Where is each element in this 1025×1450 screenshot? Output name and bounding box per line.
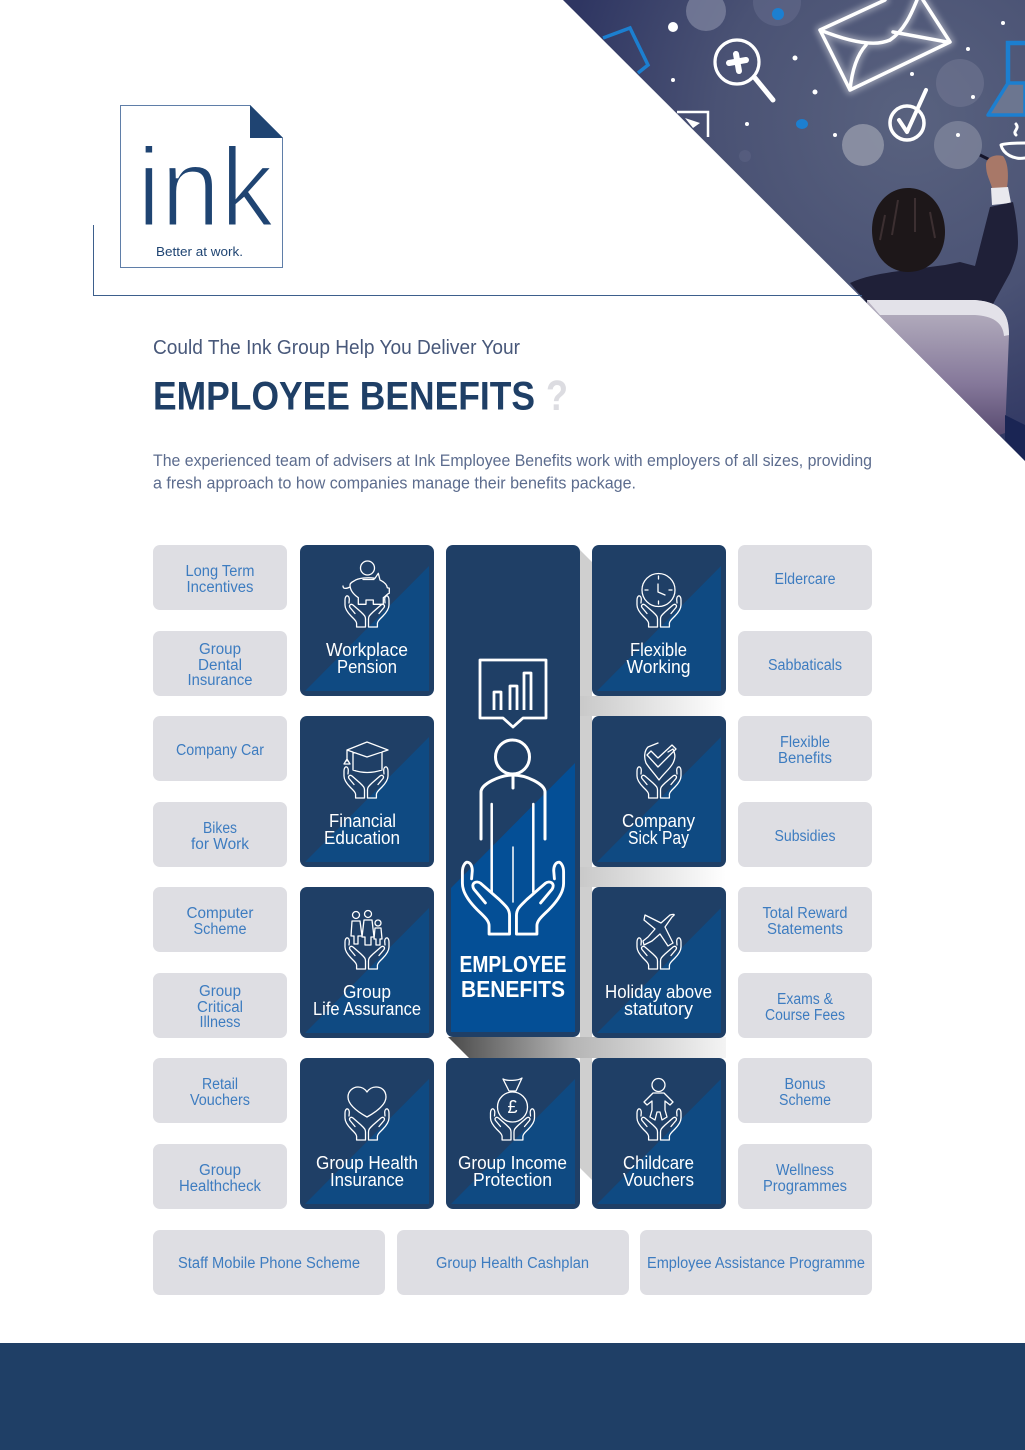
panel: bottom grey benefits: Staff Mobile Phone Scheme (178, 1255, 360, 1272)
tile: Flexible Working: Flexible (630, 640, 687, 660)
intro paragraph: a fresh approach to how companies manage their benefits package. (153, 474, 636, 492)
panel: right grey benefits: Programmes (763, 1178, 847, 1195)
footer band (0, 1343, 1025, 1450)
panel: right grey benefits: Sabbaticals (768, 657, 842, 674)
tile: Financial Education (300, 716, 434, 867)
panel: left grey benefits: for Work (191, 836, 249, 853)
title: EMPLOYEE BENEFITS (153, 374, 535, 418)
icon: heart in hands (345, 1087, 389, 1140)
tile: Company Sick Pay: Sick Pay (628, 828, 689, 848)
icon: chart speech bubble (480, 660, 546, 727)
panel: left grey benefits: Dental (198, 657, 242, 674)
logo: ink (137, 125, 275, 250)
panel: right grey benefits: Wellness (776, 1162, 834, 1179)
logo: Better at work. (156, 244, 243, 259)
tile: Group Life Assurance: Group (343, 982, 391, 1002)
tile: Workplace Pension: Workplace (326, 640, 408, 660)
panel: bottom grey benefits: Employee Assistance Programme (647, 1255, 865, 1272)
title: ? (546, 372, 568, 420)
icon: shield check in hands (637, 743, 681, 798)
panel: right grey benefits: Eldercare (774, 571, 836, 588)
panel: left grey benefits: Critical (197, 999, 243, 1016)
intro paragraph: The experienced team of advisers at Ink Employee Benefits work with employers of all sizes, providing (153, 451, 872, 470)
panel: left grey benefits: Group (199, 641, 241, 658)
panel: left grey benefits: Long Term (186, 563, 254, 580)
panel: left grey benefits (153, 545, 287, 1209)
icon: child in hands (637, 1078, 681, 1140)
central tile: Employee Benefits: BENEFITS (461, 976, 565, 1002)
panel: bottom grey benefits: Group Health Cashplan (436, 1255, 589, 1272)
tile: Holiday above statutory (592, 887, 726, 1038)
central tile: Employee Benefits: EMPLOYEE (460, 951, 566, 977)
panel: left grey benefits: Illness (200, 1014, 241, 1031)
tile: Group Health Insurance: Group Health (316, 1153, 418, 1173)
tile: Group Life Assurance (300, 887, 434, 1038)
panel: bottom grey benefits (153, 1230, 872, 1295)
panel: right grey benefits: Bonus (784, 1076, 826, 1093)
tile: Group Income Protection (446, 1058, 580, 1209)
tile: Childcare Vouchers: Childcare (623, 1153, 694, 1173)
header rule (94, 225, 862, 296)
panel: right grey benefits: Flexible (780, 734, 830, 751)
central tile: Employee Benefits (446, 545, 580, 1037)
panel: left grey benefits: Group (199, 983, 241, 1000)
icon: family in hands (345, 910, 389, 969)
icon: money bag in hands (490, 1078, 534, 1140)
tile: Holiday above statutory: statutory (624, 999, 693, 1019)
tile: Company Sick Pay: Company (622, 811, 695, 831)
background photo: man drawing icons on wall (563, 0, 1025, 461)
tile: Group Health Insurance (300, 1058, 434, 1209)
icon: pound sign: £ (507, 1097, 518, 1117)
panel: left grey benefits: Bikes (203, 820, 237, 837)
tile: Childcare Vouchers (592, 1058, 726, 1209)
tile: Financial Education: Financial (329, 811, 396, 831)
icon: person in big hands (462, 740, 564, 934)
panel: left grey benefits: Computer (186, 905, 254, 922)
tile: Group Health Insurance: Insurance (330, 1170, 404, 1190)
panel: right grey benefits: Subsidies (774, 828, 836, 845)
panel: left grey benefits: Incentives (186, 579, 254, 596)
tile: Workplace Pension (300, 545, 434, 696)
panel: right grey benefits: Statements (767, 921, 843, 938)
tile: Group Income Protection: Protection (473, 1170, 552, 1190)
panel: right grey benefits (738, 545, 872, 1209)
icon: plane in hands (637, 914, 681, 969)
intro paragraph (153, 451, 872, 492)
panel: right grey benefits: Scheme (779, 1092, 831, 1109)
panel: right grey benefits: Total Reward (762, 905, 848, 922)
tile: Financial Education: Education (324, 828, 400, 848)
tile: Workplace Pension: Pension (337, 657, 397, 677)
tile: Flexible Working (592, 545, 726, 696)
panel: left grey benefits: Insurance (188, 672, 252, 689)
tile: Group Life Assurance: Life Assurance (313, 999, 421, 1019)
panel: left grey benefits: Healthcheck (179, 1178, 261, 1195)
intro heading: Could The Ink Group Help You Deliver Your (153, 337, 520, 359)
icon: piggy bank in hands (343, 561, 389, 627)
panel: left grey benefits: Vouchers (190, 1092, 250, 1109)
icon: clock in hands (637, 574, 681, 627)
logo (120, 105, 283, 268)
panel: left grey benefits: Company Car (176, 742, 264, 759)
panel: left grey benefits: Scheme (194, 921, 246, 938)
tile: Company Sick Pay (592, 716, 726, 867)
tile shadows (448, 550, 726, 1180)
panel: left grey benefits: Retail (202, 1076, 238, 1093)
panel: right grey benefits: Course Fees (765, 1007, 845, 1024)
tile: Flexible Working: Working (626, 657, 690, 677)
tile: Childcare Vouchers: Vouchers (623, 1170, 694, 1190)
panel: right grey benefits: Exams & (777, 991, 834, 1008)
tile: Group Income Protection: Group Income (458, 1153, 567, 1173)
tile: Holiday above statutory: Holiday above (605, 982, 712, 1002)
panel: left grey benefits: Group (199, 1162, 241, 1179)
panel: right grey benefits: Benefits (778, 750, 832, 767)
icon: graduation cap in hands (344, 742, 388, 798)
